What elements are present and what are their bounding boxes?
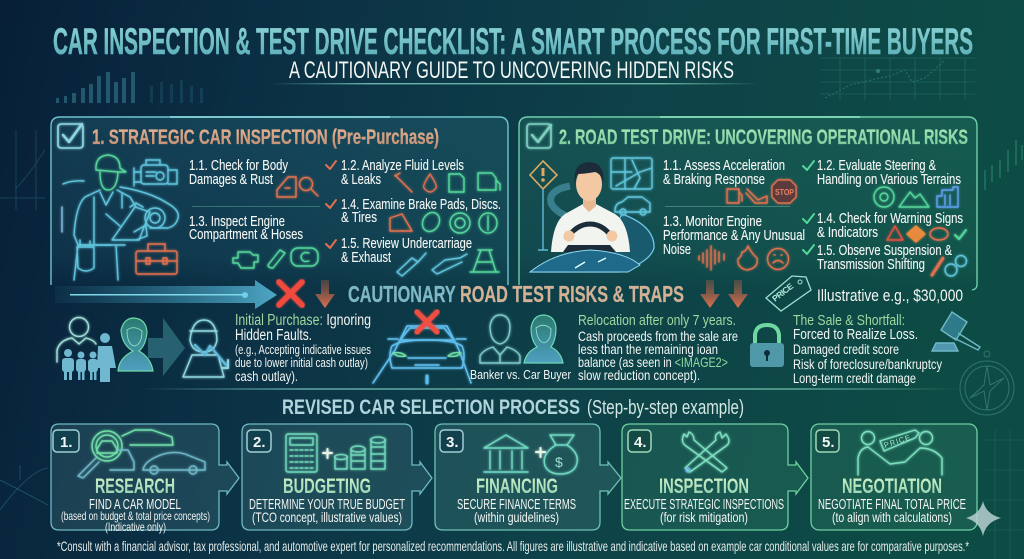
icon: crossed wrenches <box>682 432 729 472</box>
text: relocation: slow reduction concept). <box>578 367 700 383</box>
icon: bank and money bag <box>484 435 577 474</box>
decorative bar chart top left <box>56 72 203 103</box>
decorative grid lower right <box>985 430 1024 559</box>
number badge <box>816 430 839 452</box>
number badge: 1. <box>60 434 73 451</box>
icons: spring and gears <box>932 256 966 276</box>
check 1.2 <box>326 161 336 169</box>
decorative curve lower left <box>0 465 48 510</box>
label: stop sign: STOP <box>775 188 795 197</box>
section heading: revised process: (Step-by-step example) <box>587 397 744 419</box>
item 1.1 <box>189 157 288 188</box>
item 1.5 <box>817 242 952 273</box>
subtitle: A CAUTIONARY GUIDE TO UNCOVERING HIDDEN RISKS <box>289 57 734 84</box>
money bag dollar sign: $ <box>555 454 563 470</box>
icon: toolbox <box>136 244 177 274</box>
text: relocation: balance (as seen in <IMAGE2> <box>578 354 728 370</box>
text: the sale and shortfall: Risk of foreclosure/bankruptcy <box>793 356 942 372</box>
icon: down arrow <box>315 280 335 308</box>
text: the sale and shortfall: Forced to Realize Loss. <box>793 326 918 343</box>
panel: road test drive <box>519 116 977 290</box>
item 1.2 <box>817 157 961 188</box>
text: the sale and shortfall: Damaged credit score <box>793 341 899 357</box>
text: the sale and shortfall <box>793 312 942 386</box>
number badge <box>440 430 463 452</box>
item 1.3 <box>663 213 805 258</box>
item 1.1: & Braking Response <box>663 171 765 188</box>
item 1.1: 1.1. Assess Acceleration <box>663 157 785 174</box>
number badge: 4. <box>634 434 647 451</box>
icon: compass <box>960 351 1014 415</box>
item 1.3: Noise <box>663 241 691 258</box>
item 1.2 <box>341 157 464 188</box>
item 1.3: Compartment & Hoses <box>189 226 303 243</box>
step text <box>457 497 576 525</box>
icon: red cross <box>279 282 302 305</box>
icon: checkbox <box>527 124 551 148</box>
number badge: 5. <box>822 434 835 451</box>
step 2: budgeting <box>242 424 432 530</box>
step title: NEGOTIATION <box>842 475 942 498</box>
item 1.1: Damages & Rust <box>189 171 274 188</box>
icon: checkbox <box>58 124 83 148</box>
step 4: inspection <box>622 424 808 530</box>
icons: engine light, hose, pump <box>233 248 318 268</box>
text: the sale and shortfall: Long-term credit damage <box>793 370 916 386</box>
decorative line chart top right <box>820 58 975 100</box>
text: initial purchase: cash outlay). <box>235 369 298 384</box>
icon: family <box>57 318 116 382</box>
step text: (based on budget & total price concepts) <box>61 509 210 523</box>
section heading: revised process: REVISED CAR SELECTION PROCESS <box>282 396 580 419</box>
arrow: flow to cautionary row <box>55 280 277 309</box>
text: initial purchase <box>235 312 371 384</box>
icon: car buyer <box>524 315 563 363</box>
subtitle rule <box>270 83 760 84</box>
icons: fuel, seat, stop <box>727 180 796 203</box>
step text: (within guidelines) <box>474 510 559 525</box>
step title: FINANCING <box>476 475 558 498</box>
step 3: financing <box>435 424 621 530</box>
check 1.5 <box>803 245 814 254</box>
check 1.4 <box>803 214 814 223</box>
label: banker vs car buyer: Banker vs. Car Buyer <box>470 367 572 382</box>
step text: (Indicative only) <box>105 520 166 534</box>
step title: INSPECTION <box>659 475 749 498</box>
decorative candles left and right <box>0 130 1022 210</box>
item 1.2: Handling on Various Terrains <box>817 171 961 188</box>
number badge: 3. <box>446 434 459 451</box>
number badge <box>53 430 79 452</box>
item 1.2: & Leaks <box>341 171 381 188</box>
arrow: teal block arrow <box>148 318 185 376</box>
step text <box>818 497 966 525</box>
illustrative price: Illustrative e.g., $30,000 <box>817 286 963 305</box>
number badge: 2. <box>253 434 266 451</box>
check 1.4 <box>326 200 336 208</box>
step title: RESEARCH <box>95 475 175 498</box>
cautionary heading: CAUTIONARY ROAD TEST RISKS & TRAPS <box>348 281 684 307</box>
icons: sound wave, fire, sad face <box>699 246 788 270</box>
number badge <box>247 430 271 452</box>
item 1.5 <box>341 235 472 266</box>
check 1.2 <box>803 161 814 170</box>
item 1.4: 1.4. Examine Brake Pads, Discs. <box>341 196 501 213</box>
icon: engine <box>134 160 177 186</box>
icon: banker <box>480 315 520 363</box>
step text: (for risk mitigation) <box>660 510 748 525</box>
step text <box>624 497 784 525</box>
item 1.5: 1.5. Observe Suspension & <box>817 242 952 259</box>
icons: exhaust pipes and jack <box>397 250 499 276</box>
icons: warning, diamond, engine, tick <box>887 226 966 242</box>
check 1.5 <box>326 240 336 248</box>
step text: EXECUTE STRATEGIC INSPECTIONS <box>624 497 784 513</box>
icon: car with cross <box>373 312 471 383</box>
icon: worried woman <box>118 318 153 371</box>
item 1.3: 1.3. Monitor Engine <box>663 213 762 230</box>
step text: SECURE FINANCE TERMS <box>457 497 576 513</box>
item 1.5: 1.5. Review Undercarriage <box>341 235 472 252</box>
number badge <box>628 430 651 452</box>
step 1: research <box>51 424 239 534</box>
icon: handshake with price tag <box>858 430 942 475</box>
step title: BUDGETING <box>283 475 371 498</box>
divider <box>665 206 790 207</box>
item 1.2: 1.2. Evaluate Steering & <box>817 157 936 174</box>
text: initial purchase: due to lower initial cash outlay) <box>235 356 368 370</box>
icon: price tag <box>766 276 811 311</box>
panel: strategic car inspection <box>51 116 508 289</box>
icons: dipstick, drop, oil cans <box>395 173 500 192</box>
icon: padlock <box>750 325 784 367</box>
icon: calculator and coins <box>286 434 386 472</box>
icon: mechanic with clipboard and car <box>62 155 178 280</box>
item 1.3: Performance & Any Unusual <box>663 227 805 244</box>
item 1.1 <box>663 157 785 188</box>
panel heading: 1. STRATEGIC CAR INSPECTION (Pre-Purchase) <box>92 126 439 149</box>
icons: wheel, mountains, city <box>874 187 958 207</box>
icons: door and magnifier <box>277 177 318 197</box>
item 1.1: 1.1. Check for Body <box>189 157 288 174</box>
item 1.3 <box>189 213 303 243</box>
item 1.4 <box>817 210 963 241</box>
icon: car <box>615 197 650 215</box>
icon: warning sign <box>530 161 557 250</box>
icon: driver <box>530 162 640 272</box>
text: relocation: less than the remaining ioan <box>578 341 718 357</box>
item 1.5: & Exhaust <box>341 249 392 266</box>
icon: map <box>611 158 652 189</box>
step text: (TCO concept, illustrative values) <box>252 510 402 525</box>
icon: gavel <box>932 312 980 351</box>
text: initial purchase: Initial Purchase: Ignoring <box>235 312 371 329</box>
divider: section rule <box>140 388 960 390</box>
text: relocation: Relocation after only 7 years. <box>578 312 736 329</box>
divider <box>192 206 320 207</box>
icon: road <box>530 186 654 272</box>
text: relocation <box>578 312 738 383</box>
step 5: negotiation <box>811 424 977 530</box>
price tag label: PRICE <box>883 433 911 450</box>
icon: cars with magnifier <box>78 430 205 478</box>
text: relocation: Cash proceeds from the sale are <box>578 328 738 344</box>
item 1.4: 1.4. Check for Warning Signs <box>817 210 963 227</box>
item 1.5: Transmission Shifting <box>817 256 925 273</box>
icon: person with falling chart <box>183 320 228 377</box>
step text <box>249 497 405 525</box>
text: initial purchase: Hidden Faults. <box>235 327 312 344</box>
item 1.3: 1.3. Inspect Engine <box>189 213 285 230</box>
step text: (to align with calculations) <box>832 510 952 525</box>
item 1.2: 1.2. Analyze Fluid Levels <box>341 157 464 174</box>
step text: FIND A CAR MODEL <box>89 497 181 513</box>
item 1.4: & Tires <box>341 209 377 226</box>
icons: brake pads, disc, tires <box>390 209 497 235</box>
icon: price tag: PRICE <box>770 281 795 304</box>
step text: DETERMINE YOUR TRUE BUDGET <box>249 497 405 513</box>
text: initial purchase: (e.g., Accepting indicative issues <box>235 343 371 357</box>
step text <box>61 497 210 534</box>
item 1.4 <box>341 196 501 226</box>
item 1.4: & Indicators <box>817 224 878 241</box>
icon: two down arrows <box>700 280 748 308</box>
text: the sale and shortfall: The Sale & Shortfall: <box>793 312 905 329</box>
icon: sparkle star <box>966 501 1001 536</box>
